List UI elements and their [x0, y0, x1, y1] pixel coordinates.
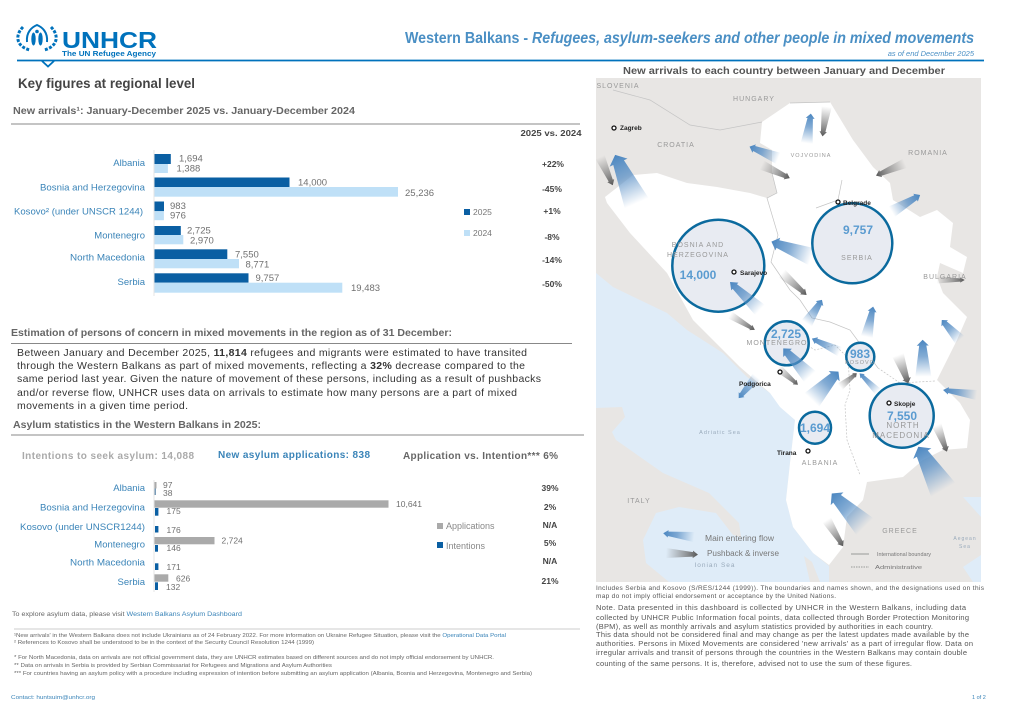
- sea: [596, 273, 829, 582]
- bar chart: arrivals: 2,725: [187, 226, 211, 236]
- bar chart: asylum: 132: [166, 582, 180, 592]
- country labels: Sea: [959, 544, 971, 550]
- bar chart: arrivals: Bosnia and Herzegovina: [40, 182, 146, 194]
- circle values: 9,757: [843, 223, 873, 237]
- bar chart: asylum: Montenegro: [94, 540, 145, 550]
- legend: arrivals: [464, 207, 492, 238]
- bar chart: arrivals: 8,771: [246, 260, 269, 270]
- capital names: Zagreb: [620, 125, 642, 132]
- country labels: Aegean: [953, 536, 977, 542]
- paragraph: same period last year. Given the nature of movement of these persons, including as a result of pushbacks: [17, 373, 541, 385]
- country labels: HUNGARY: [733, 96, 775, 103]
- circle values: 1,694: [800, 421, 830, 435]
- neighbouring land: [596, 78, 981, 582]
- circle values: 14,000: [680, 268, 717, 282]
- country labels: VOJVODINA: [791, 153, 831, 159]
- bar chart: asylum: 171: [166, 562, 181, 572]
- paragraph: through the Western Balkans as part of mixed movements, reflecting a 32% decrease compared to the: [17, 360, 525, 372]
- note: (BPM), as well as monthly arrivals and asylum statistics provided by authorities in each country.: [596, 622, 933, 631]
- note: [596, 603, 973, 668]
- circle values: 2,725: [771, 327, 801, 341]
- Aegean sea: [963, 497, 981, 582]
- bar chart: asylum: 146: [166, 543, 181, 553]
- note: irregular arrivals and transit of persons through the countries in the Western Balkans may contain double: [596, 648, 967, 657]
- footnotes: * For North Macedonia, data on arrivals are not official government data, they are UNHCR estimates based on different sources and do not imply official endorsement by UNHCR.: [14, 655, 494, 661]
- circle: Montenegro: [765, 321, 809, 365]
- contact: Contact: huntsuim@unhcr.org: [11, 695, 95, 701]
- circle values: 983: [850, 347, 870, 361]
- legend: asylum: Applications: [446, 521, 495, 531]
- UNHCR logo: [18, 25, 157, 58]
- bar chart: asylum: Serbia: [118, 577, 146, 588]
- arrows: main entering flows: [603, 113, 977, 535]
- bar chart: asylum: 2,724: [222, 536, 243, 546]
- legend: asylum: Intentions: [446, 541, 486, 551]
- legend: asylum: [437, 521, 495, 551]
- borders: [613, 90, 935, 475]
- circle values: 7,550: [887, 409, 917, 423]
- panel: asylum statistics: [11, 420, 584, 592]
- map heading: New arrivals to each country between January and December: [623, 65, 945, 77]
- country labels: SERBIA: [841, 255, 873, 262]
- note: authorities. Persons in Mixed Movements are considered 'new arrivals' as a part of irregular flow. Data on: [596, 639, 973, 648]
- bar chart: asylum: [20, 480, 422, 592]
- panel: estimation: [11, 328, 572, 412]
- bar chart: arrivals: 7,550: [235, 250, 259, 260]
- map legend: International boundary: [877, 552, 932, 558]
- wordmark: UNHCR: [62, 27, 157, 53]
- heading: key figures: Key figures at regional level: [18, 76, 195, 91]
- percent ratio column: N/A: [543, 556, 557, 566]
- bar chart: arrivals: [14, 150, 434, 296]
- map legend: Administrative: [875, 565, 922, 571]
- Western Balkans land: [605, 102, 970, 565]
- country labels: Ionian Sea: [694, 562, 736, 569]
- section heading: Asylum statistics in the Western Balkans in 2025:: [13, 420, 261, 431]
- country labels: SLOVENIA: [596, 83, 640, 90]
- paragraph: [17, 347, 541, 412]
- map disclaimer: map do not imply official endorsement or acceptance by the United Nations.: [596, 593, 836, 600]
- bar chart: arrivals: 983: [170, 201, 186, 212]
- bar chart: asylum: Bosnia and Herzegovina: [40, 502, 146, 514]
- bar chart: asylum: 175: [166, 506, 181, 516]
- bar chart: arrivals: 1,388: [176, 164, 200, 174]
- KPI: intentions: Intentions to seek asylum: 14,088: [22, 451, 194, 462]
- Italy: [596, 407, 741, 582]
- country labels: BULGARIA: [923, 274, 967, 281]
- bar chart: arrivals: North Macedonia: [70, 252, 146, 264]
- percent change column: -8%: [544, 232, 560, 242]
- bar chart: asylum: 97: [163, 480, 173, 490]
- paragraph: and/or reverse flow, UNHCR uses data on arrivals to estimate how many persons are a part of mixed: [17, 387, 517, 399]
- bar chart: asylum: 626: [176, 574, 190, 584]
- KPI: applications: New asylum applications: 838: [218, 450, 370, 461]
- footnotes: ** Data on arrivals in Serbia is provided by Serbian Commissariat for Refugees and Migrations and Asylum Authorities: [14, 663, 332, 669]
- percent change column: -50%: [542, 279, 562, 289]
- percent ratio column: 39%: [541, 483, 559, 493]
- bar chart: asylum: 38: [163, 488, 173, 498]
- bar chart: asylum: Kosovo (under UNSCR1244): [20, 522, 145, 533]
- country labels: ROMANIA: [908, 150, 948, 157]
- paragraph: movements in a given time period.: [17, 400, 188, 412]
- circle: Bosnia and Herzegovina: [672, 220, 764, 312]
- country labels: MONTENEGRO: [747, 340, 807, 347]
- country labels: BOSNIA AND: [672, 242, 724, 249]
- note: collected by UNHCR Public Information focal points, data collected through Border Protection Monitoring: [596, 613, 969, 622]
- percent change column: [542, 159, 564, 289]
- dashboard link note: To explore asylum data, please visit Western Balkans Asylum Dashboard: [12, 611, 243, 618]
- capital names: Sarajevo: [740, 270, 767, 277]
- bar chart: arrivals: 25,236: [405, 188, 434, 199]
- tagline: The UN Refugee Agency: [62, 49, 157, 58]
- column heading: 2025 vs. 2024: [520, 128, 582, 138]
- bar chart: arrivals: 2,970: [190, 236, 214, 246]
- country labels: ITALY: [627, 498, 651, 505]
- country labels: GREECE: [882, 528, 918, 535]
- icon: UNHCR emblem: [18, 25, 56, 50]
- bar chart: arrivals: 976: [170, 210, 186, 222]
- percent ratio column: 5%: [544, 538, 557, 548]
- percent ratio column: [541, 483, 559, 586]
- bar chart: arrivals: Kosovo² (under UNSCR 1244): [14, 206, 143, 218]
- circle values: [680, 223, 917, 435]
- map legend: Main entering flow: [705, 534, 774, 543]
- bar chart: asylum: 10,641: [396, 499, 422, 509]
- bar chart: arrivals: Serbia: [118, 277, 146, 288]
- percent change column: +22%: [542, 159, 564, 169]
- legend: arrivals: 2025: [473, 207, 492, 217]
- capital names: Belgrade: [843, 200, 871, 207]
- bar chart: arrivals: Montenegro: [94, 230, 145, 242]
- percent ratio column: N/A: [543, 520, 557, 530]
- percent change column: -45%: [542, 184, 562, 194]
- page number: 1 of 2: [972, 695, 986, 701]
- percent change column: +1%: [543, 206, 561, 216]
- country labels: NORTH: [886, 421, 920, 430]
- bar chart: arrivals: 14,000: [298, 178, 327, 188]
- footnotes: *** For countries having an asylum policy with a procedure including expression of intention before submitting an asylum application (Albania, Bosnia and Herzegovina, Montenegro and Serbia): [14, 671, 532, 677]
- title: Western Balkans - Refugees, asylum-seekers and other people in mixed movements: [405, 30, 974, 47]
- country labels: ALBANIA: [802, 460, 838, 467]
- KPI: ratio: Application vs. Intention*** 6%: [403, 451, 558, 462]
- bar chart: asylum: North Macedonia: [70, 558, 146, 568]
- arrows: pushback and reverse flows: [595, 106, 965, 549]
- percent change column: -14%: [542, 255, 562, 265]
- country labels: [596, 83, 977, 569]
- footnotes: [14, 633, 532, 677]
- capital names: Tirana: [777, 450, 797, 457]
- circle: North Macedonia: [870, 384, 934, 448]
- percent ratio column: 2%: [544, 502, 557, 512]
- map legend: [663, 528, 932, 571]
- country labels: CROATIA: [657, 142, 695, 149]
- capital names: Podgorica: [739, 381, 771, 388]
- paragraph: Between January and December 2025, 11,814 refugees and migrants were estimated to have transited: [17, 347, 527, 359]
- footnotes: ² References to Kosovo shall be understood to be in the context of the Security Council Resolution 1244 (1999): [14, 640, 314, 646]
- bar chart: asylum: Albania: [113, 483, 146, 494]
- note: counting of the same persons. It is, therefore, advised not to use the sum of these figures.: [596, 659, 912, 668]
- circle: Serbia: [812, 203, 892, 283]
- panel: new arrivals: [11, 106, 582, 296]
- percent ratio column: 21%: [541, 576, 559, 586]
- map legend: Pushback & inverse: [707, 549, 780, 558]
- bar chart: arrivals: 19,483: [351, 283, 380, 294]
- note: Note. Data presented in this dashboard is collected by UNHCR in the Western Balkans, including data: [596, 603, 967, 612]
- map disclaimer: Includes Serbia and Kosovo (S/RES/1244 (1999)). The boundaries and names shown, and the designations used on this: [596, 585, 985, 592]
- bar chart: arrivals: Albania: [113, 158, 146, 169]
- Corfu island: [804, 556, 820, 582]
- section heading: New arrivals¹: January-December 2025 vs. January-December 2024: [13, 106, 355, 117]
- capital names: [620, 125, 916, 457]
- header rule: [17, 60, 984, 66]
- country labels: KOSOVO: [845, 360, 875, 366]
- bar chart: asylum: 176: [166, 525, 181, 535]
- circle: Albania: [799, 412, 831, 444]
- legend: arrivals: 2024: [473, 228, 492, 238]
- note: This data should not be considered final and may change as per the latest updates made available by the: [596, 630, 969, 639]
- country labels: MACEDONIA: [872, 431, 930, 440]
- bar chart: arrivals: 1,694: [179, 154, 203, 164]
- circle: Kosovo: [846, 343, 874, 371]
- bar chart: arrivals: 9,757: [256, 273, 279, 284]
- map: [595, 78, 981, 582]
- footnotes: ¹New arrivals' in the Western Balkans does not include Ukrainians as of 24 February 2022. For more information on Ukraine Refugee Situation, please visit the Operational Data Portal: [14, 633, 506, 639]
- country labels: Adriatic Sea: [699, 430, 741, 436]
- map disclaimer: [596, 585, 985, 600]
- section heading: Estimation of persons of concern in mixed movements in the region as of 31 December:: [11, 328, 452, 339]
- capital markers: [612, 126, 891, 453]
- date subtitle: as of end December 2025: [888, 49, 975, 58]
- capital names: Skopje: [894, 401, 916, 408]
- country labels: HERZEGOVINA: [667, 252, 729, 259]
